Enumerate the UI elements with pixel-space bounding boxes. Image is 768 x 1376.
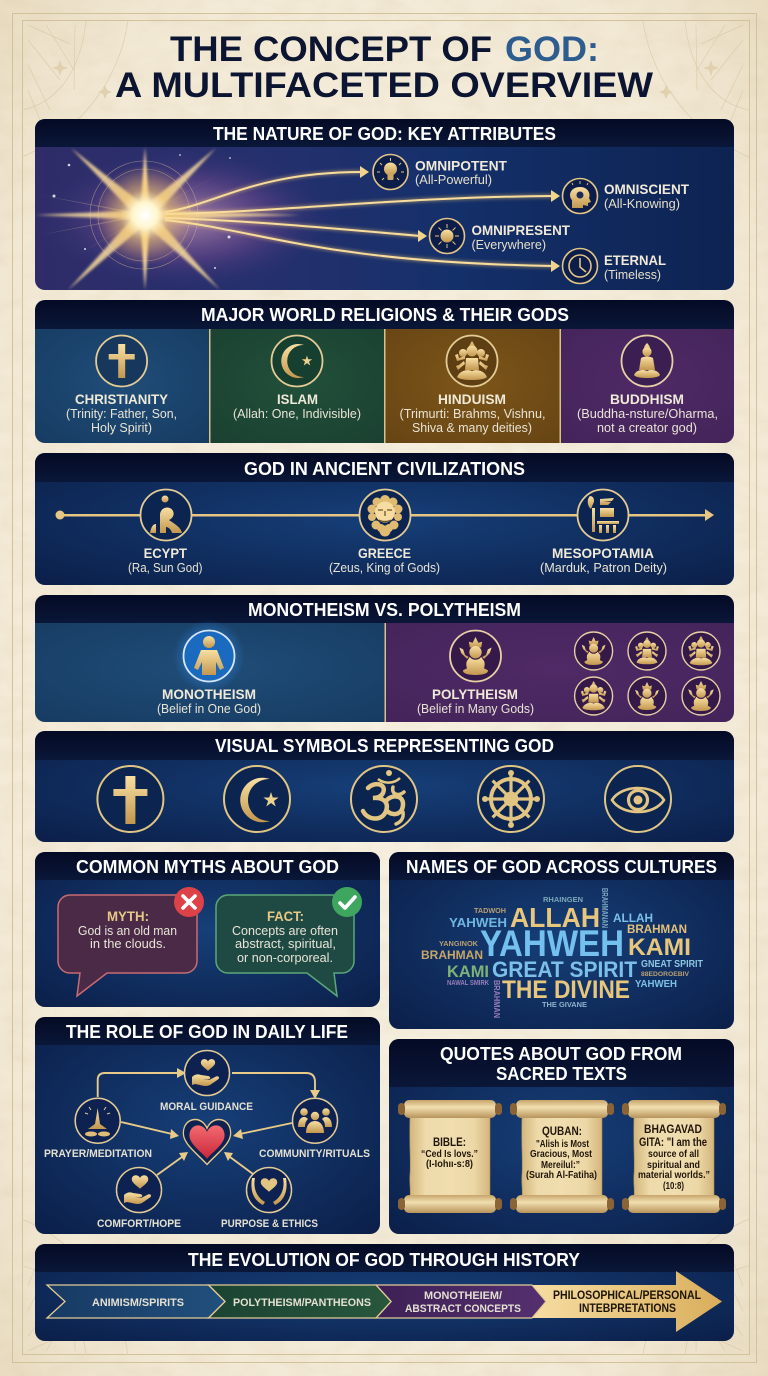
heading: religions: MAJOR WORLD RELIGIONS & THEIR GODS [201, 305, 569, 325]
heading: myths: COMMON MYTHS ABOUT GOD [76, 857, 339, 877]
word cloud: YANGINOK [439, 941, 478, 948]
word cloud: YAHWEH [480, 923, 624, 964]
callout: fact [216, 887, 362, 996]
panel: major world religions [35, 300, 734, 443]
panel: visual symbols [35, 731, 734, 842]
word cloud: YAHWEH [449, 916, 507, 930]
monotheism column: MONOTHEISM [162, 686, 256, 702]
word cloud: THE DIVINE [502, 976, 630, 1004]
callout: myth: God is an old man [78, 924, 177, 938]
heading: key attributes: THE NATURE OF GOD: KEY ATTRIBUTES [213, 124, 556, 144]
scroll: Quran: QUBAN: [542, 1124, 582, 1138]
stage: animism and spirits: ANIMISM/SPIRITS [92, 1297, 184, 1309]
attribute: omniscient: OMNISCIENT [604, 181, 689, 197]
node: prayer and meditation [44, 1098, 152, 1160]
attribute: eternal: ETERNAL [604, 252, 666, 268]
heading: evolution [35, 1244, 734, 1272]
node: comfort and hope: COMFORT/HOPE [97, 1218, 181, 1230]
timeline arrow [56, 509, 714, 521]
word cloud: KAMI [628, 934, 691, 961]
scroll: Bhagavad Gita [622, 1100, 726, 1213]
heading: symbols: VISUAL SYMBOLS REPRESENTING GOD [215, 736, 554, 756]
scroll: Bible [398, 1100, 502, 1213]
callout: myth: MYTH: [107, 909, 149, 924]
panel: names of God [389, 852, 734, 1029]
polytheism column [417, 630, 534, 716]
panel: common myths [35, 852, 380, 1007]
word cloud: NAWAL SMIRK [447, 980, 489, 987]
attribute: omnipotent: OMNIPOTENT [415, 158, 507, 174]
node: prayer and meditation: PRAYER/MEDITATION [44, 1148, 152, 1160]
scroll: Bhagavad Gita: GITA: "I am the [639, 1135, 707, 1149]
civilization: Mesopotamia [540, 490, 667, 575]
panel: monotheism vs polytheism [35, 595, 734, 722]
node: purpose and ethics: PURPOSE & ETHICS [221, 1218, 318, 1230]
word cloud: TADWOH [474, 908, 506, 915]
word cloud: BRAHMAN [421, 950, 483, 962]
civilization: Mesopotamia: MESOPOTAMIA [552, 545, 654, 561]
callout: fact: Concepts are often [232, 924, 338, 938]
column: Islam: (Allah: One, Indivisible) [233, 406, 361, 421]
arrows: cycle to the heart [98, 1068, 320, 1175]
column: Hinduism: HINDUISM [438, 391, 506, 407]
panel: the nature of God [35, 119, 734, 290]
stage: polytheism and pantheons [208, 1285, 391, 1318]
scroll: Bhagavad Gita: (10:8) [663, 1180, 684, 1192]
title: THE CONCEPT OF [170, 30, 492, 69]
stage: polytheism and pantheons: POLYTHEISM/PANTHEONS [233, 1297, 371, 1309]
attribute: omniscient [562, 178, 689, 214]
word cloud: BRAHMAN [627, 924, 687, 936]
heading: daily life [35, 1017, 380, 1045]
heading: civilizations: GOD IN ANCIENT CIVILIZATIONS [244, 459, 525, 479]
heading: daily life: THE ROLE OF GOD IN DAILY LIFE [66, 1022, 348, 1042]
symbol: crescent and star [224, 766, 290, 832]
civilization: Mesopotamia: (Marduk, Patron Deity) [540, 560, 667, 575]
civilization: Egypt [128, 490, 202, 575]
stage: philosophical and personal [532, 1271, 722, 1332]
civilization: Greece [329, 490, 440, 575]
node: community and rituals [259, 1098, 370, 1160]
callout: fact: FACT: [267, 909, 304, 924]
word cloud: KAMI [447, 962, 489, 981]
word cloud: BRAHMAN [492, 980, 501, 1018]
attribute: omnipresent: (Everywhere) [472, 237, 546, 252]
stage: monotheism and abstract concepts: ABSTRACT CONCEPTS [405, 1303, 521, 1315]
stage: animism and spirits [47, 1285, 225, 1318]
word cloud: 88EDOROEBIV [641, 971, 690, 978]
column: Buddhism [577, 336, 718, 435]
column: Buddhism: (Buddha-nsture/Oharma, [577, 406, 718, 421]
attribute: eternal: (Timeless) [604, 267, 661, 282]
scroll: Bible: (I-Iohıı-s:8) [426, 1158, 473, 1170]
column: Hinduism [400, 336, 546, 435]
heading: symbols [35, 731, 734, 760]
heading: names: NAMES OF GOD ACROSS CULTURES [406, 857, 717, 877]
scroll: Quran: Gracious, Most [530, 1148, 592, 1160]
scroll: Bible: BIBLE: [433, 1135, 466, 1149]
heading: religions [35, 300, 734, 329]
node: community and rituals: COMMUNITY/RITUALS [259, 1148, 370, 1160]
word cloud: RHAINGEN [543, 897, 583, 904]
monotheism column: (Belief in One God) [157, 701, 261, 716]
panel: ancient civilizations [35, 453, 734, 585]
heading: quotes [389, 1039, 734, 1087]
panel: role in daily life [35, 1017, 380, 1234]
icons: many gods [575, 632, 720, 715]
word cloud: ALLAH [510, 902, 600, 933]
heading: civilizations [35, 453, 734, 482]
scroll: Bhagavad Gita: spiritual and [647, 1159, 700, 1171]
scroll: Bible: “Ced Is lovs.” [421, 1148, 478, 1160]
node: moral guidance: MORAL GUIDANCE [160, 1101, 253, 1113]
callout: fact: abstract, spiritual, [235, 937, 336, 951]
scroll: Quran: Mereilul:” [541, 1159, 580, 1171]
symbol: all-seeing eye [605, 766, 671, 832]
word cloud: ALLAH [613, 911, 653, 925]
column: Islam: ISLAM [277, 391, 318, 407]
column: Christianity: CHRISTIANITY [75, 391, 169, 407]
stage: monotheism and abstract concepts [376, 1285, 546, 1318]
attribute: omnipresent [430, 218, 570, 254]
attribute: omniscient: (All-Knowing) [604, 196, 680, 211]
column: Buddhism: BUDDHISM [610, 391, 684, 407]
heading: evolution: THE EVOLUTION OF GOD THROUGH HISTORY [188, 1250, 580, 1270]
stage: philosophical and personal: PHILOSOPHICAL/PERSONAL [553, 1290, 701, 1302]
attribute: omnipotent: (All-Powerful) [415, 172, 492, 187]
column: Christianity: Holy Spirit) [91, 420, 152, 435]
civilization: Egypt: ECYPT [144, 545, 187, 561]
heading: quotes: SACRED TEXTS [496, 1064, 627, 1084]
panel: evolution through history [35, 1244, 734, 1341]
symbol: dharma wheel [478, 766, 544, 832]
title: GOD: [505, 30, 599, 69]
column: Christianity: (Trinity: Father, Son, [66, 406, 177, 421]
heading: mono vs poly [35, 595, 734, 623]
word cloud: GREAT SPIRIT [492, 957, 637, 982]
civilization: Greece: (Zeus, King of Gods) [329, 560, 440, 575]
column: Buddhism: not a creator god) [597, 420, 697, 435]
scroll: Quran: "Alish is Most [536, 1138, 589, 1150]
scroll: Bhagavad Gita: BHAGAVAD [644, 1122, 702, 1136]
civilization: Egypt: (Ra, Sun God) [128, 560, 202, 575]
civilization: Greece: GREECE [358, 545, 411, 561]
polytheism column: (Belief in Many Gods) [417, 701, 534, 716]
scroll: Bhagavad Gita: material worlds.” [638, 1169, 710, 1181]
stage: monotheism and abstract concepts: MONOTHEIEM/ [424, 1290, 502, 1302]
title [115, 30, 653, 105]
callout: myth: in the clouds. [90, 937, 166, 951]
scroll: Quran [510, 1100, 614, 1213]
symbol: cross [97, 766, 163, 832]
callout: fact: or non-corporeal. [237, 951, 333, 965]
heading: mono vs poly: MONOTHEISM VS. POLYTHEISM [248, 600, 521, 620]
attribute: omnipresent: OMNIPRESENT [472, 222, 570, 238]
stage: philosophical and personal: INTEBPRETATIONS [579, 1303, 676, 1315]
column: Hinduism: (Trimurti: Brahms, Vishnu, [400, 406, 546, 421]
symbol: om [351, 766, 417, 832]
callout: myth [58, 887, 204, 996]
panel: quotes [389, 1039, 734, 1234]
heading: names [389, 852, 734, 880]
attribute: omnipotent [373, 154, 507, 190]
column: Hinduism: Shiva & many deities) [412, 420, 532, 435]
column: Christianity [66, 336, 177, 435]
scroll: Quran: (Surah Al-Fatiha) [526, 1169, 597, 1181]
node: moral guidance [160, 1050, 253, 1113]
heading: quotes: QUOTES ABOUT GOD FROM [440, 1044, 682, 1064]
word cloud: BRAHMANAN [600, 888, 609, 928]
polytheism column: POLYTHEISM [432, 686, 518, 702]
heading: myths [35, 852, 380, 880]
center: heart [183, 1120, 231, 1164]
word cloud [421, 888, 703, 1018]
word cloud: THE GIVANE [542, 1002, 587, 1009]
scroll: Bhagavad Gita: source of all [648, 1148, 699, 1160]
heading: key attributes [35, 119, 734, 147]
attribute: eternal [562, 248, 666, 284]
icon: radiant divine star [37, 148, 308, 290]
word cloud: GNEAT SPIRIT [641, 959, 703, 970]
title: A MULTIFACETED OVERVIEW [115, 66, 653, 105]
node: comfort and hope [97, 1168, 181, 1230]
word cloud: YAHWEH [635, 979, 677, 990]
node: purpose and ethics [221, 1168, 318, 1230]
arrows: rays to attributes [165, 166, 560, 272]
column: Islam [233, 336, 361, 421]
monotheism column [157, 620, 261, 716]
